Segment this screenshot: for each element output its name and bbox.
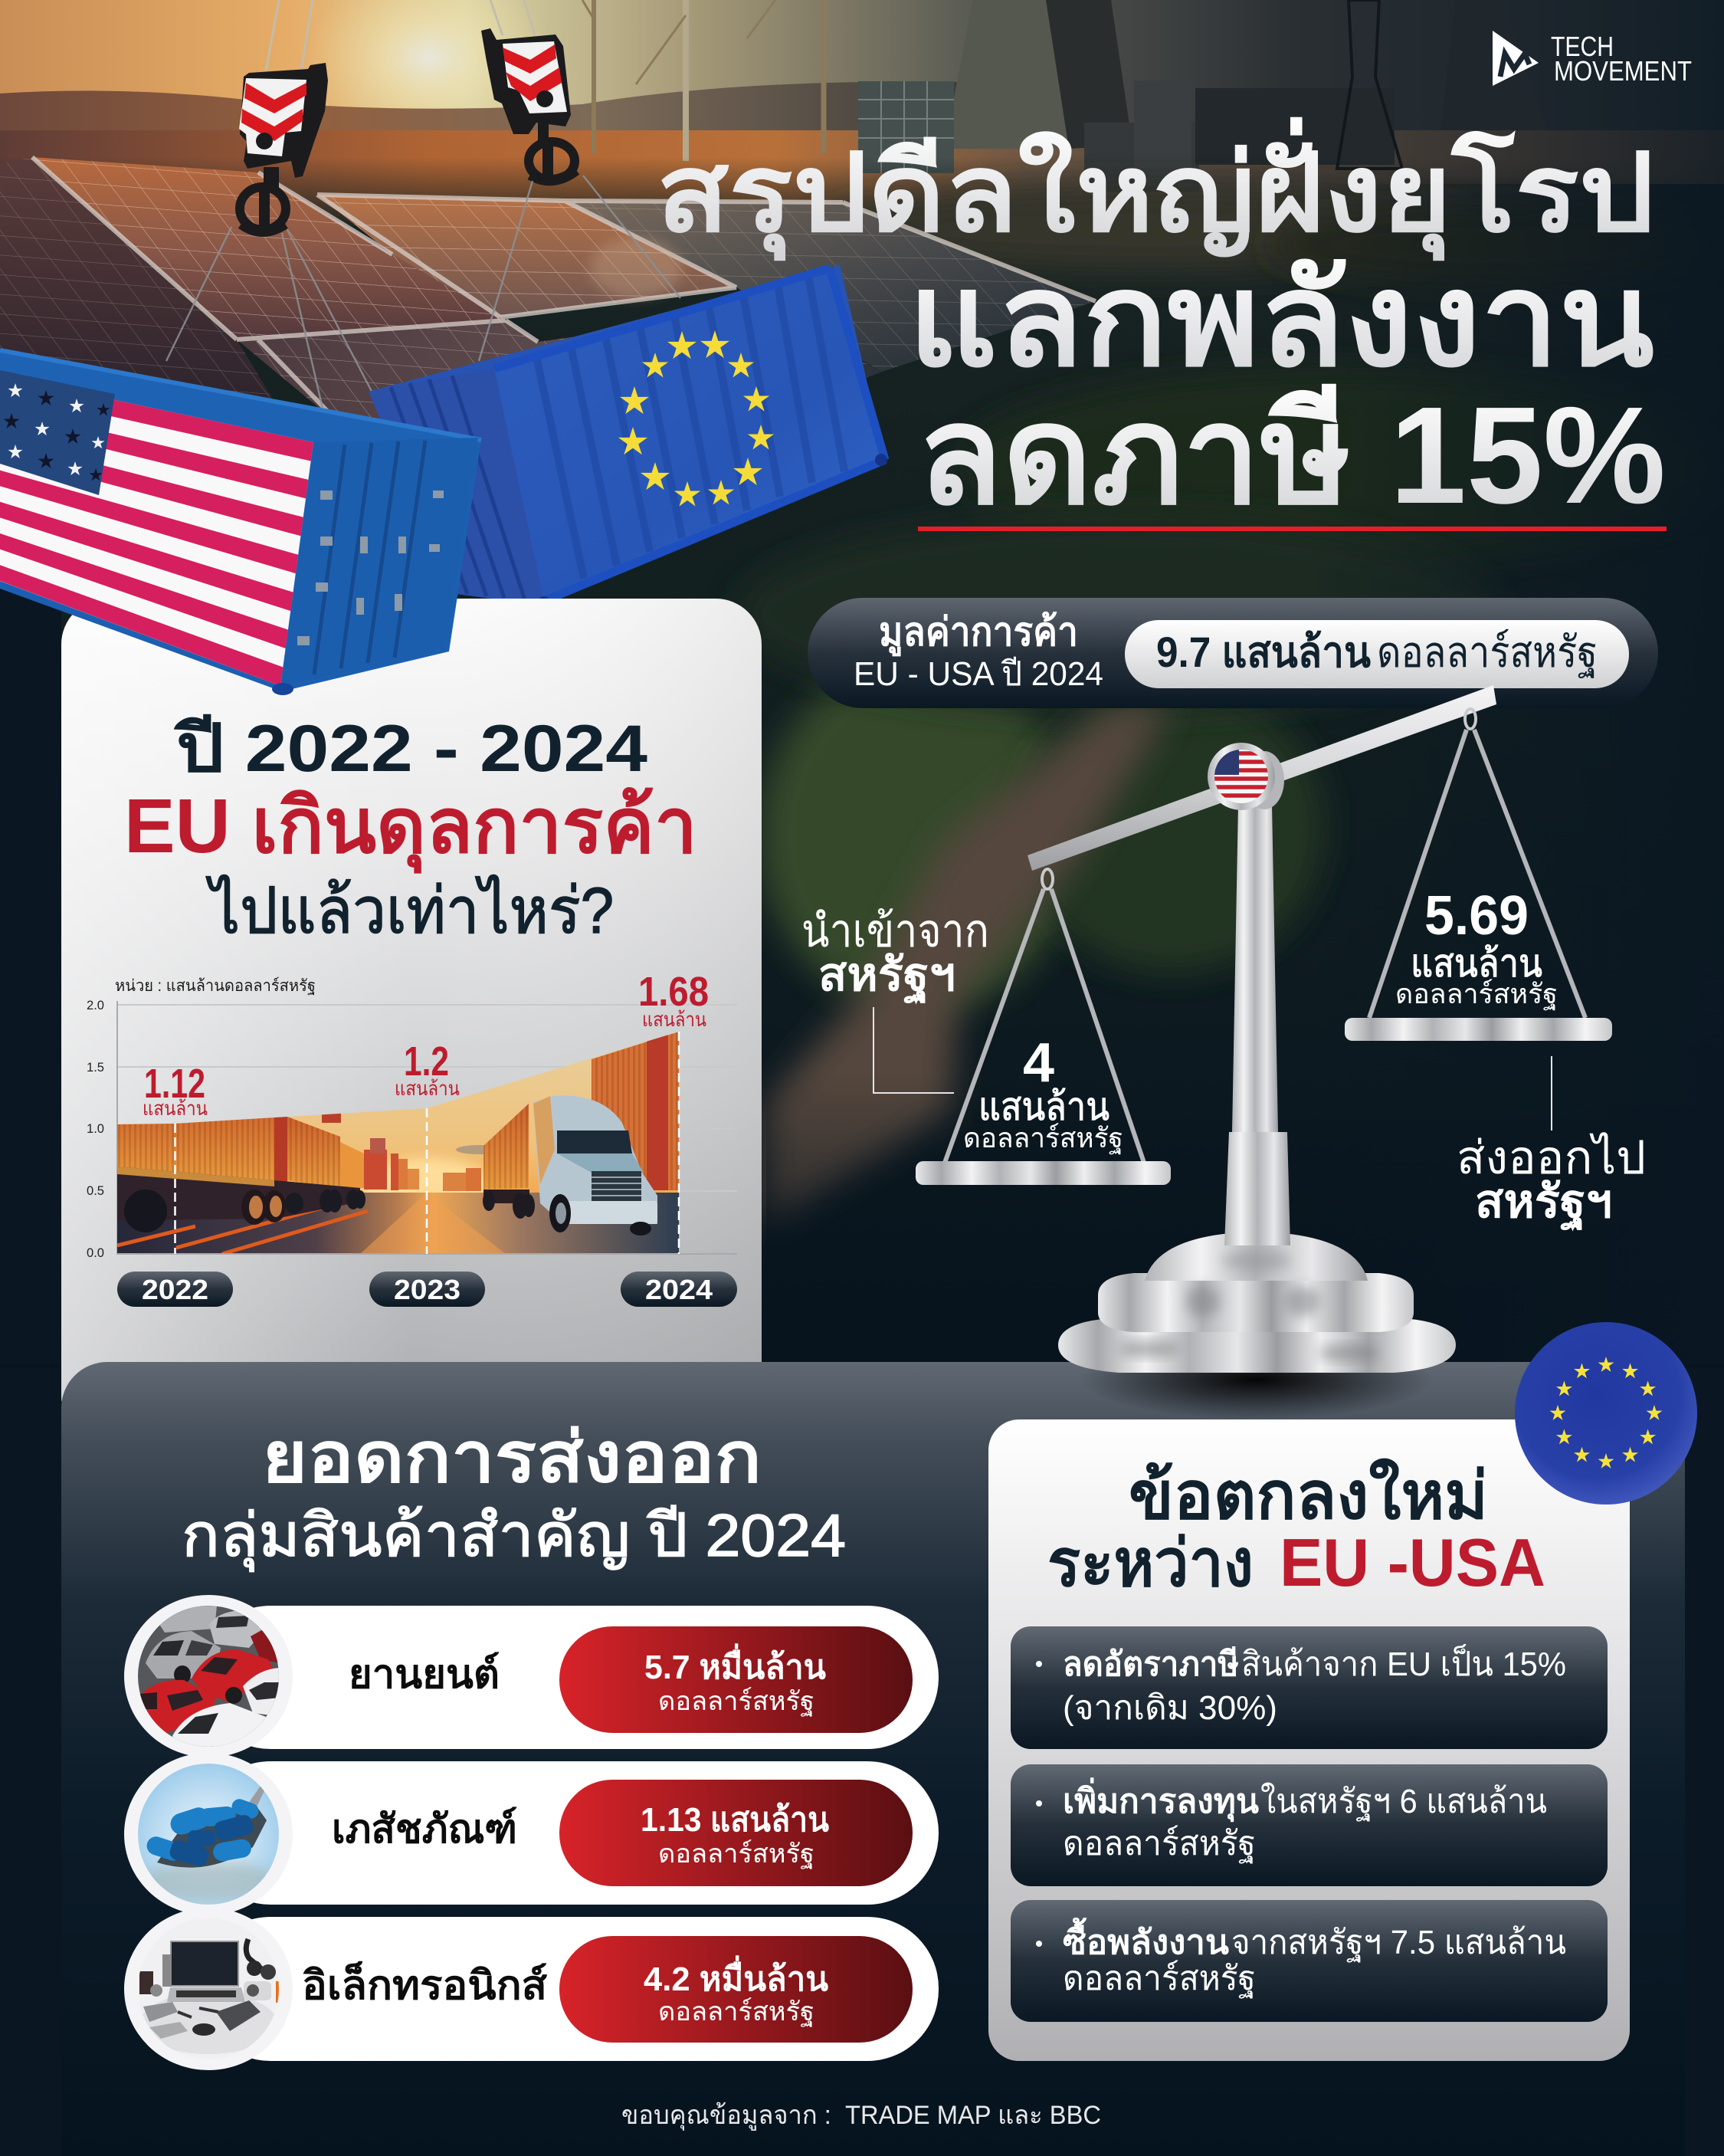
red cars (251, 1629, 280, 1663)
label: pharmaceuticals: เภสัชภัณฑ์ (332, 1807, 517, 1852)
value pill: vehicles: ดอลลาร์สหรัฐ (658, 1687, 814, 1717)
agreement heading: ระหว่าง (1047, 1527, 1254, 1600)
left pan strings and pan (916, 869, 1171, 1185)
scale base (1058, 1232, 1456, 1373)
logo: Tech Movement (1493, 31, 1692, 87)
value pill: electronics: ดอลลาร์สหรัฐ (658, 1997, 814, 2027)
row: electronics (124, 1908, 939, 2070)
scale beam (1028, 685, 1496, 871)
value pill: pharmaceuticals: 1.13 แสนล้าน (641, 1801, 829, 1839)
agreement item: investment: ในสหรัฐฯ 6 แสนล้าน (1260, 1782, 1547, 1821)
wind turbines (582, 0, 824, 161)
value labels: แสนล้าน (395, 1077, 460, 1100)
agreement heading (1047, 1459, 1545, 1600)
value labels: 1.2 (404, 1039, 449, 1085)
ground: dark grass field fading downward (0, 157, 1724, 1368)
trade value amount: ดอลลาร์สหรัฐ (1377, 628, 1598, 678)
connector: imports label to pan (873, 1007, 954, 1093)
photo: electronic devices (138, 1918, 280, 2059)
row: pharmaceuticals (124, 1753, 939, 1915)
panel heading (124, 712, 697, 947)
label: imports from US: สหรัฐฯ (818, 949, 955, 1004)
agreement item: energy: จากสหรัฐฯ 7.5 แสนล้าน (1231, 1924, 1566, 1962)
value labels (143, 969, 709, 1120)
distant containers (364, 1150, 387, 1190)
panel: exports by product group (61, 1340, 1685, 2156)
scale value: exports to US: 5.69 (1424, 885, 1529, 947)
agreement item: energy (1011, 1900, 1608, 2022)
area chart: trade surplus (87, 969, 737, 1260)
agreement heading: ข้อตกลงใหม่ (1129, 1459, 1488, 1533)
agreement item: investment (1011, 1764, 1608, 1886)
background photo: sunset sky, solar panels and power plant (0, 0, 1724, 1368)
scale value: exports to US (1395, 885, 1558, 1011)
row: vehicles (124, 1595, 939, 1757)
axis labels (87, 998, 104, 1260)
panel heading: EU เกินดุลการค้า (124, 783, 697, 874)
dark left-side solar panel (0, 157, 291, 429)
axis labels: 0.0 (87, 1245, 104, 1260)
title underline (918, 527, 1667, 531)
solar panel four (565, 201, 1096, 372)
value pill: pharmaceuticals (559, 1780, 913, 1886)
truck cab (533, 1095, 657, 1224)
balance scale (916, 685, 1612, 1373)
agreement item: tariff (1011, 1626, 1608, 1749)
container front face with EU flag (494, 268, 885, 601)
axis labels: 0.5 (87, 1183, 104, 1198)
agreement item: energy: ดอลลาร์สหรัฐ (1063, 1960, 1256, 1998)
year pills: 2022 (142, 1274, 208, 1305)
hedge row (820, 188, 1479, 272)
value pill: vehicles (559, 1626, 913, 1733)
title (657, 116, 1666, 533)
photo: parked cars (138, 1606, 284, 1751)
agreement item: energy: ซื้อพลังงาน (1063, 1917, 1229, 1961)
label: electronics: อิเล็กทรอนิกส์ (302, 1961, 547, 2008)
panel: trade value header pill (808, 598, 1658, 708)
agreement item: tariff: ลดอัตราภาษี (1063, 1646, 1239, 1683)
white cars (172, 1703, 266, 1751)
crane hook left (239, 0, 328, 231)
panel: trade balance 2022-2024 (61, 599, 762, 1442)
agreement item: investment: ดอลลาร์สหรัฐ (1063, 1825, 1256, 1863)
value pill: vehicles: 5.7 หมื่นล้าน (644, 1643, 826, 1686)
dirt path (766, 705, 1172, 1226)
value labels: 1.68 (638, 969, 709, 1015)
agreement item: tariff: สินค้าจาก EU เป็น 15% (1241, 1644, 1566, 1683)
panel heading: ปี 2022 - 2024 (173, 712, 647, 786)
agreement item: tariff: (จากเดิม 30%) (1063, 1689, 1277, 1727)
container roof (0, 350, 481, 442)
right pan strings and pan (1345, 709, 1612, 1041)
scale value: exports to US: ดอลลาร์สหรัฐ (1395, 978, 1558, 1011)
pivot with US flag (1208, 743, 1284, 810)
chart unit note: หน่วย : แสนล้านดอลลาร์สหรัฐ (115, 976, 316, 995)
scale value: imports from US: แสนล้าน (978, 1085, 1109, 1128)
source credit: ขอบคุณข้อมูลจาก : TRADE MAP และ BBC (621, 2101, 1101, 2131)
photo: blue capsules on a spoon (138, 1763, 280, 1905)
scale value: exports to US: แสนล้าน (1411, 942, 1542, 985)
logo wordmark (1551, 31, 1692, 87)
axis labels: 1.5 (87, 1060, 104, 1075)
label: imports from US (801, 905, 989, 1004)
trade value label: EU - USA ปี 2024 (854, 655, 1103, 693)
truck trailer (483, 1104, 529, 1190)
agreement item: investment: เพิ่มการลงทุน (1063, 1777, 1259, 1823)
dashed year markers (175, 1032, 679, 1254)
crane hook right (481, 0, 576, 180)
value pill: electronics: 4.2 หมื่นล้าน (644, 1955, 828, 1998)
EU container (369, 264, 887, 609)
value pill: pharmaceuticals: ดอลลาร์สหรัฐ (658, 1839, 814, 1869)
trade value label: มูลค่าการค้า (879, 610, 1078, 657)
cooling towers and buildings (944, 0, 1069, 149)
label: vehicles: ยานยนต์ (349, 1652, 500, 1697)
scale value: imports from US: ดอลลาร์สหรัฐ (963, 1122, 1123, 1155)
US container (0, 350, 481, 695)
trade value label (854, 610, 1103, 693)
label: exports to US: ส่งออกไป (1457, 1131, 1646, 1183)
logo wordmark: MOVEMENT (1554, 55, 1692, 87)
right containers (592, 1032, 679, 1190)
title: แลกพลังงาน (908, 248, 1654, 393)
label: exports to US: สหรัฐฯ (1475, 1176, 1612, 1231)
exports heading: ยอดการส่งออก (262, 1419, 762, 1497)
axis labels: 2.0 (87, 998, 104, 1012)
label: imports from US: นำเข้าจาก (801, 905, 989, 957)
connector: exports label to pan (1551, 1056, 1552, 1131)
year pills: 2023 (394, 1274, 460, 1305)
value pill: electronics (559, 1936, 913, 2043)
title: สรุปดีลใหญ่ฝั่งยุโรป (657, 116, 1654, 261)
icon: logo mark (1493, 31, 1539, 86)
trade value amount: 9.7 แสนล้าน (1156, 628, 1371, 676)
container left side (369, 369, 544, 601)
shadow under scale (1080, 1340, 1433, 1419)
scale value: imports from US (963, 1032, 1123, 1155)
grass patches (958, 368, 1724, 567)
agreement heading: EU -USA (1280, 1524, 1545, 1600)
panel: new EU-USA agreement (988, 1419, 1630, 2061)
chart image: trucks on highway at sunset (117, 1027, 680, 1255)
trade value amount (1156, 628, 1598, 678)
year pills (117, 1272, 737, 1307)
label: exports to US (1457, 1131, 1646, 1231)
US flag painted on container (0, 376, 313, 686)
scale pillar (1224, 805, 1290, 1245)
flag canton (0, 370, 115, 495)
solar panel three (237, 310, 882, 475)
exports heading: กลุ่มสินค้าสำคัญ ปี 2024 (182, 1501, 846, 1572)
left trailers (117, 1117, 274, 1180)
value labels: 1.12 (144, 1061, 205, 1107)
solar panel two (317, 195, 736, 317)
icon: EU flag badge (1515, 1322, 1697, 1505)
hanging chains (166, 176, 680, 422)
panel heading: ไปแล้วเท่าไหร่? (205, 875, 614, 947)
solar panel one (32, 157, 506, 340)
scale value: imports from US: 4 (1023, 1032, 1054, 1094)
title: ลดภาษี 15% (918, 379, 1666, 533)
value labels: แสนล้าน (642, 1008, 706, 1031)
logo wordmark: TECH (1551, 31, 1614, 62)
year pills: 2024 (645, 1274, 713, 1305)
container side doors (280, 438, 478, 686)
value labels: แสนล้าน (143, 1097, 208, 1120)
axis labels: 1.0 (87, 1121, 104, 1136)
silver cars (157, 1606, 217, 1633)
exports heading (182, 1419, 846, 1572)
